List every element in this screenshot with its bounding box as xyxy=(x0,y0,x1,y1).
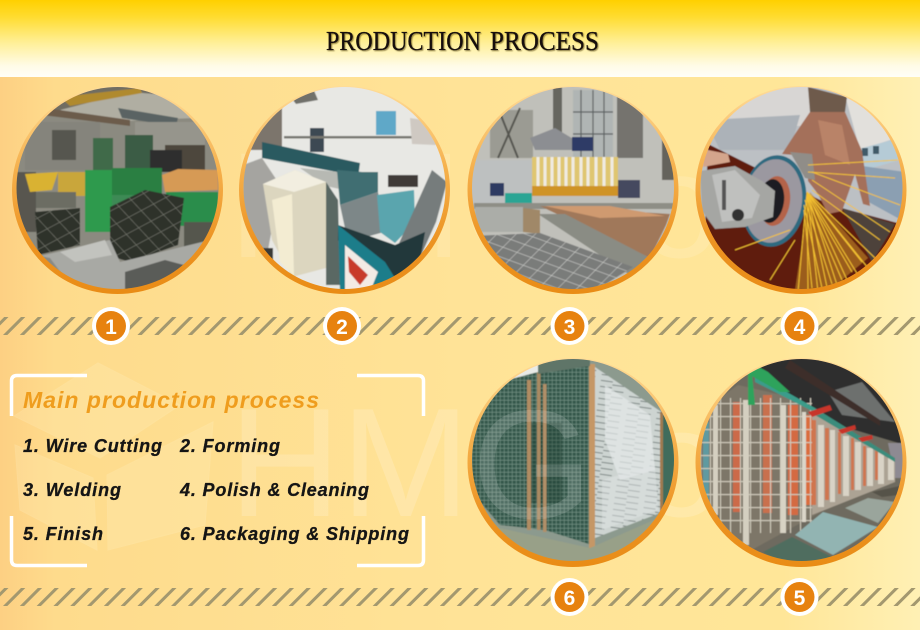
photo 1: wire cutting machines xyxy=(16,87,218,289)
photo ring 1 xyxy=(12,86,223,294)
watermark over photo 6: G xyxy=(472,378,593,551)
photo ring 4 xyxy=(696,86,906,294)
process list: 1. Wire Cutting xyxy=(23,436,162,456)
step badge 1: 1 xyxy=(105,316,117,339)
photo 6: packaged mesh panels xyxy=(472,359,674,561)
step badge 2: 2 xyxy=(336,316,348,339)
process list: 5. Finish xyxy=(23,524,103,544)
step badge 1 xyxy=(92,307,130,345)
photo 4: polishing grinder xyxy=(700,87,902,289)
step badge 5: 5 xyxy=(794,587,806,610)
photo ring 3 xyxy=(468,86,678,294)
watermark: large company letters, upper row: o xyxy=(638,121,721,289)
header band xyxy=(0,0,920,77)
striped divider: lower xyxy=(0,588,920,606)
process list: 2. Forming xyxy=(179,436,280,456)
process list xyxy=(23,436,409,544)
step badge 6: 6 xyxy=(564,587,575,610)
panel: main production process xyxy=(12,376,424,566)
process list: 4. Polish & Cleaning xyxy=(179,480,369,500)
photo 2: forming machine xyxy=(244,87,446,289)
watermark: large company letters, upper row: HMG xyxy=(229,121,579,289)
step badge 3 xyxy=(550,307,588,345)
watermark: cube of mesh xyxy=(14,363,213,550)
step badge 4: 4 xyxy=(794,316,806,339)
photo ring 5 xyxy=(696,358,906,567)
panel heading: Main production process xyxy=(23,387,319,413)
title: PRODUCTION xyxy=(326,26,481,56)
corner brackets xyxy=(12,376,424,566)
step badge 5 xyxy=(780,578,818,616)
watermark: large company letters, lower row: o xyxy=(638,376,724,549)
step badge 2 xyxy=(323,307,361,345)
striped divider: upper xyxy=(0,317,920,335)
process list: 6. Packaging & Shipping xyxy=(180,524,409,544)
photo ring 6 xyxy=(468,358,678,567)
step badge 3: 3 xyxy=(564,316,575,339)
title: PROCESS xyxy=(490,26,599,56)
photo 5: finish and coating line xyxy=(700,359,902,561)
step badge 4 xyxy=(780,307,818,345)
watermark: large company letters, lower row: HMG xyxy=(229,376,591,549)
step badge 6 xyxy=(550,578,588,616)
photo 3: welding line xyxy=(472,87,674,289)
process list: 3. Welding xyxy=(23,480,121,500)
photo ring 2 xyxy=(239,86,450,294)
